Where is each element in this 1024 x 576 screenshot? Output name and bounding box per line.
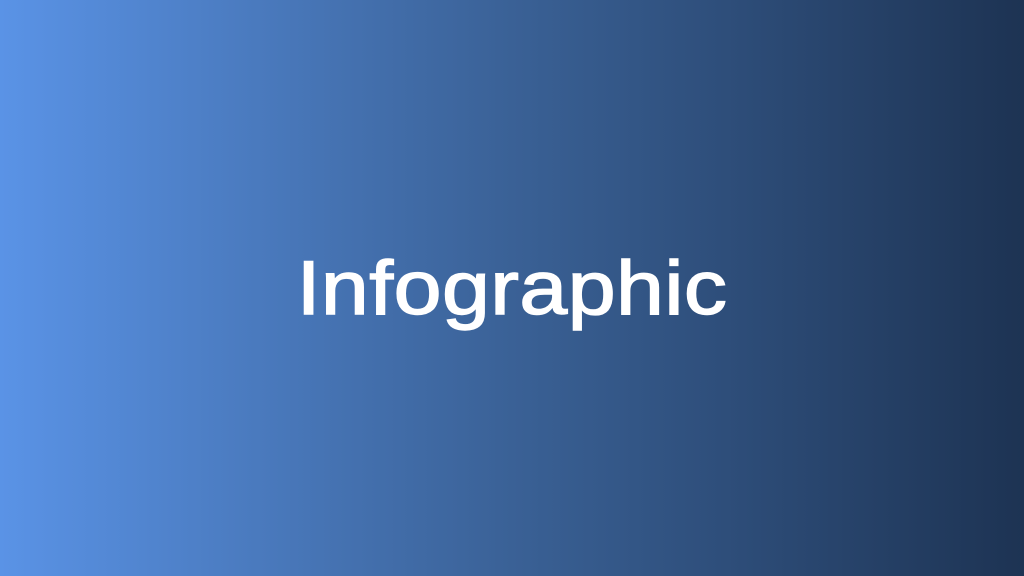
- title: Infographic: [297, 245, 727, 330]
